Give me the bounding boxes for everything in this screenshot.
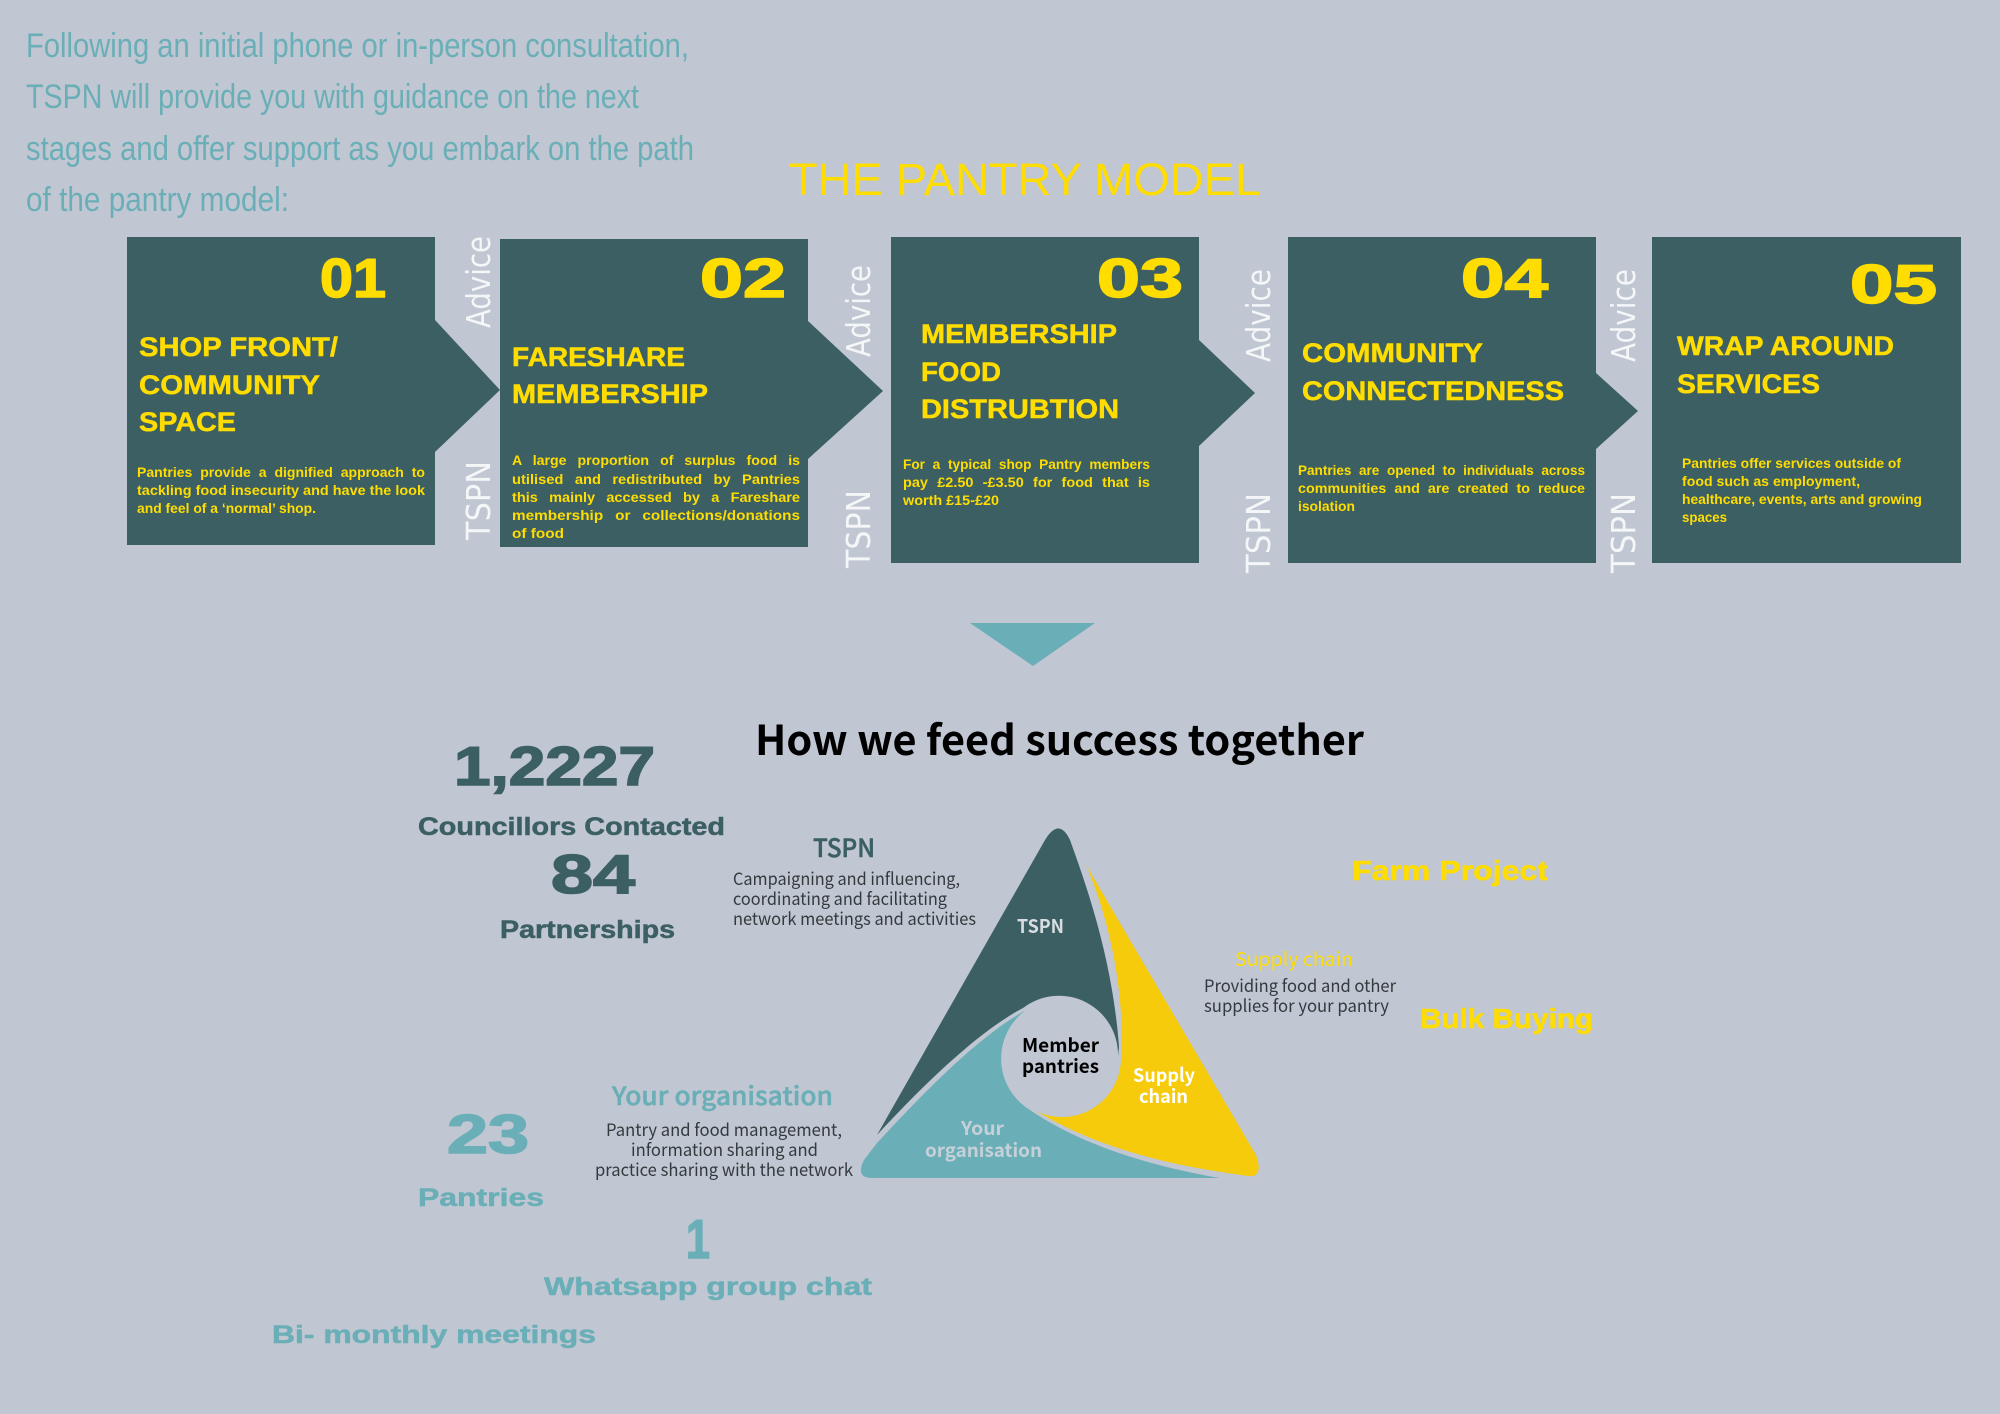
panel: step 02: [500, 239, 883, 547]
step 01 heading: [139, 332, 339, 437]
step 03 arrow box: [891, 237, 1255, 563]
stat: pantries: 23: [447, 1103, 529, 1165]
step 02 heading: MEMBERSHIP: [512, 379, 708, 409]
step 03 heading: [921, 319, 1119, 424]
side labels: Advice and TSPN: TSPN: [459, 461, 498, 541]
label: your organisation: [925, 1114, 1042, 1163]
step 02 heading: FARESHARE: [512, 342, 685, 372]
label: member pantries: pantries: [1022, 1052, 1099, 1079]
callout: TSPN: Campaigning and influencing,: [733, 865, 960, 890]
step 05 heading: WRAP AROUND: [1677, 331, 1894, 361]
label: bulk buying: Bulk Buying: [1420, 1003, 1593, 1034]
title: THE PANTRY MODEL: [789, 154, 1261, 205]
step 04 number: 04: [1461, 247, 1549, 309]
callout: supply chain: Supply chain: [1235, 945, 1353, 972]
step 01 heading: SHOP FRONT/: [139, 332, 339, 362]
callout: your organisation: [595, 1077, 854, 1181]
intro text: Following an initial phone or in-person consultation,: [26, 27, 689, 65]
step 04 heading: COMMUNITY: [1302, 338, 1483, 368]
step 03 heading: MEMBERSHIP: [921, 319, 1117, 349]
label: farm project: Farm Project: [1352, 855, 1548, 886]
step 02 heading: [512, 342, 708, 409]
step 05 description: food such as employment,: [1682, 473, 1860, 489]
step 05 description: [1682, 455, 1922, 525]
callout: supply chain: supplies for your pantry: [1204, 992, 1389, 1017]
callout: TSPN: TSPN: [813, 829, 875, 865]
step 02 description: A large proportion of surplus food is: [512, 452, 800, 468]
stat: partnerships: [500, 843, 675, 944]
step 02 arrow box: [500, 239, 883, 547]
stat: partnerships: 84: [551, 843, 636, 905]
step 03 description: [902, 456, 1150, 508]
step 02 description: of food: [512, 525, 564, 541]
side labels: Advice and TSPN: Advice: [1604, 269, 1643, 362]
callout: TSPN: coordinating and facilitating: [733, 885, 947, 910]
label: supply chain: Supply: [1133, 1061, 1195, 1088]
step 05 description: healthcare, events, arts and growing: [1682, 491, 1922, 507]
label: member pantries: [1022, 1031, 1100, 1079]
stat: councillors contacted: 1,2227: [454, 735, 655, 797]
side labels: Advice and TSPN: TSPN: [1239, 493, 1278, 574]
intro text: [26, 27, 694, 219]
callout: TSPN: [733, 829, 976, 930]
step 01 heading: COMMUNITY: [139, 370, 320, 400]
stat: pantries: [418, 1103, 544, 1212]
step 02 description: utilised and redistributed by Pantries: [512, 471, 800, 487]
panel: step 03: [891, 237, 1255, 563]
side labels: Advice and TSPN: Advice: [459, 236, 498, 328]
step 04 description: Pantries are opened to individuals across: [1298, 462, 1585, 478]
step 03 description: worth £15-£20: [902, 492, 999, 508]
step 01 number: 01: [320, 247, 386, 309]
panel: step 05: [1652, 237, 1961, 563]
label: supply chain: chain: [1139, 1082, 1188, 1109]
label: member pantries: Member: [1022, 1031, 1100, 1058]
segment: TSPN: [877, 828, 1119, 1135]
callout: your organisation: information sharing and: [631, 1136, 818, 1161]
stat: councillors contacted: [418, 735, 725, 841]
step 04 heading: [1302, 338, 1564, 406]
step 03 number: 03: [1097, 247, 1183, 309]
step 04 description: [1298, 462, 1585, 514]
callout: TSPN: network meetings and activities: [733, 905, 976, 930]
callout: supply chain: Providing food and other: [1204, 972, 1396, 997]
arrow: down triangle: [970, 623, 1095, 666]
step 05 description: Pantries offer services outside of: [1682, 455, 1901, 471]
intro text: TSPN will provide you with guidance on the next: [26, 78, 639, 116]
step 05 heading: [1677, 331, 1894, 399]
label: supply chain: [1133, 1061, 1195, 1109]
callout: your organisation: Pantry and food management,: [606, 1116, 842, 1141]
stat: councillors contacted: Councillors Contacted: [418, 813, 725, 841]
step 02 description: [512, 452, 800, 541]
step 03 heading: DISTRUBTION: [921, 394, 1119, 424]
label: TSPN: TSPN: [1017, 912, 1064, 939]
step 04 heading: CONNECTEDNESS: [1302, 376, 1564, 406]
step 03 heading: FOOD: [921, 357, 1001, 387]
heading: how we feed success together: How we feed success together: [755, 707, 1364, 767]
step 01 arrow box: [127, 237, 500, 545]
side labels: Advice and TSPN: [459, 236, 1643, 574]
stat: whatsapp group chat: [544, 1208, 873, 1301]
step 01 heading: SPACE: [139, 407, 236, 437]
label: your organisation: Your: [960, 1114, 1005, 1141]
side labels: Advice and TSPN: TSPN: [1604, 493, 1643, 574]
label: bi-monthly meetings: Bi- monthly meetings: [272, 1321, 596, 1349]
step 05 description: spaces: [1682, 509, 1727, 525]
stat: whatsapp group chat: 1: [686, 1208, 710, 1270]
step 02 number: 02: [700, 247, 786, 309]
segment: your organisation: [861, 1010, 1220, 1178]
label: your organisation: organisation: [925, 1136, 1042, 1163]
stat: whatsapp group chat: Whatsapp group chat: [544, 1273, 873, 1301]
step 05 number: 05: [1850, 253, 1937, 315]
callout: supply chain: [1204, 945, 1396, 1017]
panel: step 04: [1288, 237, 1638, 563]
step 01 description: and feel of a ‘normal’ shop.: [137, 500, 316, 516]
step 03 description: pay £2.50 -£3.50 for food that is: [903, 474, 1150, 490]
step 01 description: tackling food insecurity and have the look: [137, 482, 425, 498]
intro text: stages and offer support as you embark on the path: [26, 130, 694, 168]
step 05 heading: SERVICES: [1677, 369, 1820, 399]
stat: pantries: Pantries: [418, 1184, 544, 1212]
side labels: Advice and TSPN: TSPN: [839, 490, 878, 569]
step 02 description: membership or collections/donations: [512, 507, 800, 523]
step 05 box: [1652, 237, 1961, 563]
chart: member pantries triangle: [861, 828, 1259, 1178]
step 03 description: For a typical shop Pantry members: [903, 456, 1150, 472]
step 04 arrow box: [1288, 237, 1638, 563]
panel: step 01: [127, 237, 500, 545]
step 04 description: communities and are created to reduce: [1298, 480, 1585, 496]
segment: supply chain: [1036, 865, 1259, 1176]
step 01 description: Pantries provide a dignified approach to: [137, 464, 425, 480]
step 02 description: this mainly accessed by a Fareshare: [512, 489, 800, 505]
intro text: of the pantry model:: [26, 181, 289, 219]
step 01 description: [137, 464, 425, 516]
step 04 description: isolation: [1298, 498, 1355, 514]
stat: partnerships: Partnerships: [500, 916, 675, 944]
side labels: Advice and TSPN: Advice: [1239, 269, 1278, 362]
callout: your organisation: practice sharing with the network: [595, 1156, 854, 1181]
side labels: Advice and TSPN: Advice: [839, 265, 878, 357]
callout: your organisation: Your organisation: [611, 1077, 833, 1113]
